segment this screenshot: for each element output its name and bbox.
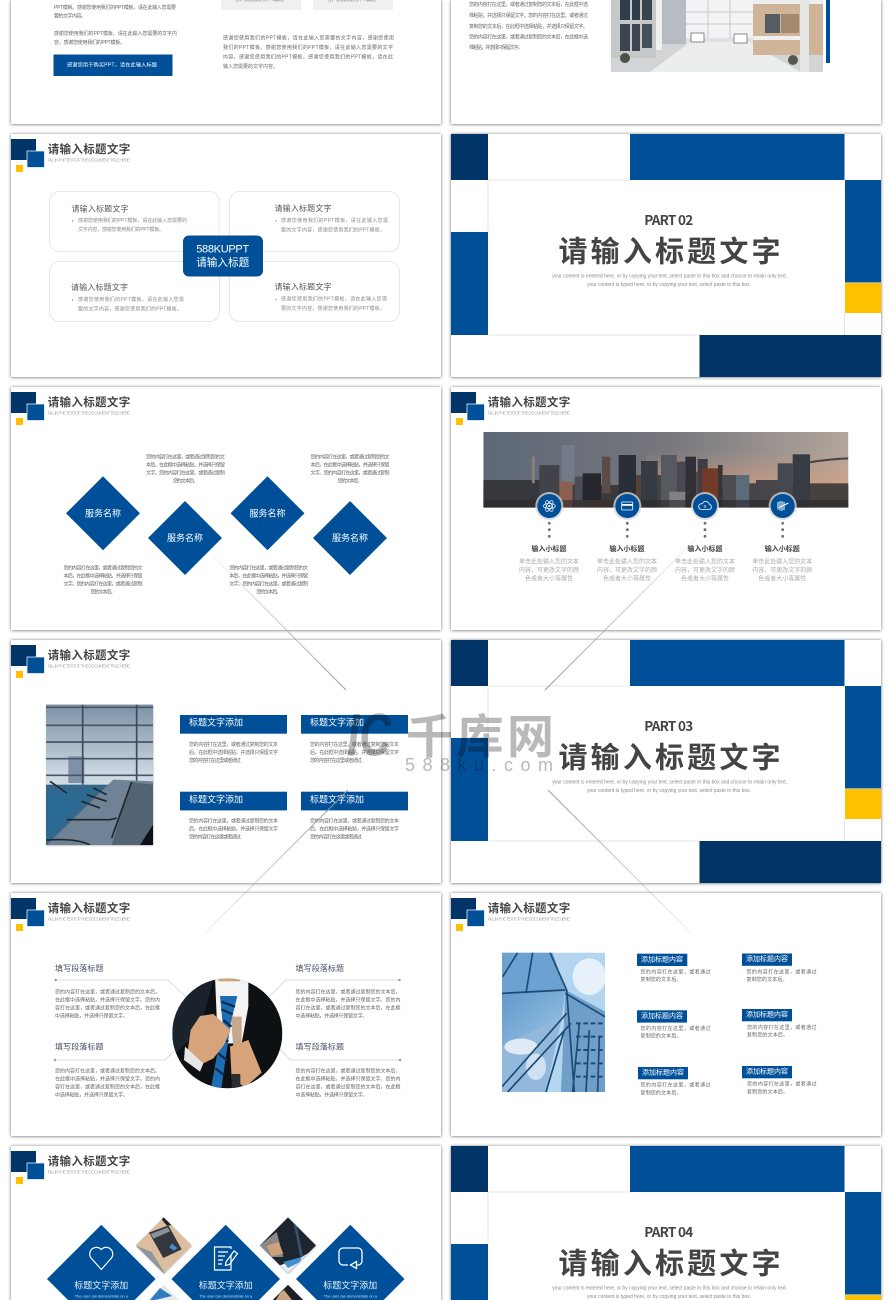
section title: 请输入标题文字 (558, 228, 780, 270)
card 2 (230, 192, 400, 252)
column 1 text: 单击此处输入您的文本 (519, 558, 579, 566)
paragraph top left (55, 963, 160, 1020)
text below diamond 1: 您的文本后。 (90, 589, 116, 596)
section subtitle (552, 274, 787, 288)
column 4 text: 单击此处输入您的文本 (752, 558, 812, 566)
card 1: 感谢您使用我们的PPT模板，请在此输入您需要的 (78, 217, 187, 224)
paragraph top left: 您的内容打在这里，或者通过复制您的文本后， (55, 989, 160, 996)
block 4: 后，在此框中选择粘贴，并选择只保留文字 (310, 826, 399, 833)
card 2: 感谢您使用我们的PPT模板，请在此输入您需 (281, 217, 388, 224)
text above diamond 4: 您的文本后。 (338, 478, 362, 485)
block 3: 标题文字添加 (189, 794, 243, 804)
column 4 text (752, 544, 812, 583)
paragraph top right: 在此框中选择粘贴，并选择只保留文字。您的内 (296, 997, 400, 1004)
slide: service diamonds (row 3 left) (11, 387, 441, 630)
watermark diagonal lines (203, 539, 696, 935)
label 6: 您的内容打在这里，或者通过 (747, 1081, 816, 1088)
card 4 (230, 262, 400, 322)
paragraph top right: 中选择粘贴，并选择只保留文字。 (296, 1013, 368, 1020)
block 3: 您的内容打在这里或者通过 (189, 834, 241, 841)
connector lines (55, 980, 400, 1060)
right paragraph: 感谢您使用我们的PPT模板，请在此输入您需要的文字内容，感谢您使用 (223, 34, 394, 42)
diamond 2: 服务名称 (167, 532, 203, 543)
paragraph top right: 填写段落标题 (296, 963, 344, 973)
column 2 text: 单击此处输入您的文本 (597, 558, 657, 566)
diamond card 3: The user can demonstrate on a (324, 1294, 378, 1298)
paragraph bottom right (296, 1042, 400, 1098)
label 2: 添加标题内容 (746, 954, 788, 963)
block 2 (301, 715, 408, 764)
right paragraph (223, 34, 394, 70)
text above diamond 4: 本后，在此框中选择粘贴，并选择只保留 (310, 462, 390, 469)
column 4 text: 输入小标题 (765, 544, 800, 553)
label 5: 复制您的文本后。 (640, 1089, 682, 1096)
label 4: 您的内容打在这里，或者通过 (747, 1024, 816, 1031)
photo: building interior (611, 0, 823, 72)
section subtitle (552, 780, 787, 794)
left text block: 要的文字内容。 (54, 12, 86, 20)
column 2 text (597, 544, 657, 583)
column 3 text: 输入小标题 (688, 544, 722, 553)
column 1 text: 内容，可更改文字的颜 (519, 566, 579, 574)
slide header: 请输入标题文字 (48, 142, 130, 156)
slide header: 请输入标题文字 (48, 901, 130, 915)
blue button (54, 54, 172, 76)
block 2: 后，在此框中选择粘贴，并选择只保留文字 (310, 749, 399, 756)
photo diamond: calculator (136, 1217, 192, 1273)
text above diamond 4: 文字。您的内容打在这里，或者通过复制 (310, 470, 390, 477)
block 4: 标题文字添加 (310, 794, 364, 804)
label 4 (742, 1009, 816, 1038)
slide header: FILL IN THE TEXT OF THE DOCUMENT TITLE HERE (488, 410, 570, 416)
right paragraph: 输入您需要的文字内容。 (223, 63, 278, 70)
section subtitle (552, 1286, 787, 1300)
text above diamond 4 (310, 454, 390, 485)
part number: PART 03 (644, 715, 693, 735)
centre badge (183, 236, 263, 276)
label 3: 复制您的文本后。 (640, 1033, 682, 1040)
watermark url: 588ku.com (405, 755, 553, 775)
card 3: 请输入标题文字 (71, 282, 128, 292)
card 1 (50, 192, 219, 252)
column 3 text: 内容，可更改文字的颜 (675, 566, 735, 574)
paragraph top left: 在此框中选择粘贴，并选择只保留文字。您的内 (55, 997, 160, 1004)
connector dots (548, 522, 784, 538)
text block: 您的内容打在这里，或者通过复制您的文本后，在此框中选 (469, 1, 588, 8)
paragraph bottom left: 填写段落标题 (55, 1042, 104, 1052)
slide: text and interior photo (row 1 right) (451, 0, 881, 124)
paragraph bottom right: 容打在这里，或者通过复制您的文本后，在此框 (296, 1083, 400, 1090)
label 6: 添加标题内容 (746, 1066, 788, 1076)
card 3: 要的文字内容，感谢您使用我们的PPT模板。 (78, 306, 182, 312)
block 1: 您的内容打在这里，或者通过复制您的文本 (189, 741, 278, 748)
grey tag boxes (221, 0, 393, 10)
left text block (54, 4, 177, 46)
slide header (11, 898, 130, 931)
label 1: 您的内容打在这里，或者通过 (640, 968, 710, 976)
card 2: 请输入标题文字 (274, 203, 332, 213)
label 5: 您的内容打在这里，或者通过 (640, 1082, 710, 1089)
photo: man adjusting tie (172, 977, 282, 1089)
section title: 请输入标题文字 (558, 734, 780, 776)
photo: airport lounge (46, 705, 153, 845)
diamond 1: 服务名称 (85, 507, 121, 518)
slide header (451, 392, 570, 425)
icon: heart (90, 1247, 113, 1270)
icon: document and pencil (214, 1247, 238, 1270)
slide header: 请输入标题文字 (48, 1154, 130, 1168)
block 2: 您的内容打在这里或者通过 (310, 757, 362, 764)
block 2: 您的内容打在这里，或者通过复制您的文本 (310, 741, 399, 748)
column 2 text: 输入小标题 (610, 544, 644, 553)
slide: four text cards (row 2 left) (11, 134, 441, 377)
diamond 2 (148, 501, 222, 575)
block 3 (180, 792, 287, 841)
block 1 (180, 715, 287, 764)
block 1: 标题文字添加 (189, 716, 243, 728)
slide: text and button (row 1 left) (11, 0, 441, 124)
right paragraph: 我们的PPT模板。感谢您使用我们的PPT模板，请在此输入您需要的文字 (223, 44, 393, 51)
icon: atom (535, 492, 563, 520)
text below diamond 3: 文字。您的内容打在这里，或者通过复制 (229, 581, 308, 588)
text below diamond 3 (229, 565, 308, 596)
photo diamonds: lower row (148, 1285, 303, 1300)
label 1: 添加标题内容 (641, 954, 683, 963)
slide header (11, 139, 130, 172)
label 5 (638, 1067, 710, 1096)
text below diamond 1: 您的内容打在这里，或者通过复制您的文 (64, 565, 142, 572)
text below diamond 1: 本后，在此框中选择粘贴，并选择只保留 (64, 573, 142, 580)
slide header: FILL IN THE TEXT OF THE DOCUMENT TITLE HERE (48, 664, 130, 668)
diamond card 3 (296, 1225, 405, 1300)
watermark name: 千库网 (406, 698, 554, 768)
slide: portrait circle with four paragraphs (row 5 left) (11, 893, 441, 1136)
left text block: 感谢您使用我们的PPT模板。请在此输入您需要的文字内 (54, 30, 177, 37)
label 1: 复制您的文本后。 (640, 976, 682, 983)
diamond 1 (66, 476, 140, 550)
paragraph bottom left: 在此框中选择粘贴，并选择只保留文字。您的内 (55, 1075, 160, 1082)
connector end dots (54, 979, 401, 1061)
text below diamond 3: 您的文本后。 (256, 589, 281, 596)
section subtitle: your content is entered here, or by copying your text, select paste in this box and choose to retain only text. (552, 274, 787, 280)
column 1 text: 色或者大小等属性 (525, 575, 573, 583)
card 4: 感谢您使用我们的PPT模板，请在此输入您需 (281, 296, 387, 302)
left text block: 容，感谢您使用我们的PPT模板。 (54, 39, 125, 46)
paragraph bottom right: 中选择粘贴，并选择只保留文字。 (296, 1091, 368, 1098)
label 4: 添加标题内容 (746, 1010, 788, 1018)
paragraph bottom left: 您的内容打在这里，或者通过复制您的文本后。 (55, 1067, 160, 1074)
block 2: 标题文字添加 (310, 716, 364, 728)
slide header (11, 392, 130, 425)
paragraph top left: 容打在这里，或者通过复制您的文本后，在此框 (55, 1005, 160, 1012)
watermark logo mark: IC (347, 702, 392, 768)
text block: 择粘贴，并选择只保留文字。 (469, 44, 523, 51)
slide header: 请输入标题文字 (48, 395, 130, 409)
card 1: 请输入标题文字 (72, 204, 128, 214)
left text block: PPT模板。感谢您使用我们的PPT模板，请在此输入您需要 (54, 4, 176, 11)
paragraph bottom right: 您的内容打在这里，或者通过复制您的文本后， (296, 1067, 400, 1074)
diamond card 2: The user can demonstrate on a (199, 1294, 253, 1298)
icon: bank card (613, 492, 641, 520)
section divider: PART 03 (451, 640, 881, 883)
text below diamond 3: 您的内容打在这里，或者通过复制您的文 (229, 565, 308, 572)
watermark (203, 539, 696, 935)
text below diamond 1 (64, 565, 142, 596)
section subtitle: your content is typed here, or by copying your text, select paste in this box. (587, 282, 751, 288)
paragraph bottom left (55, 1042, 160, 1098)
colour blocks (451, 134, 881, 377)
block 1: 您的内容打在这里或者通过 (189, 757, 241, 764)
card 2: 要的文字内容，感谢您使用我们的PPT模板。 (281, 226, 385, 234)
text above diamond 2: 您的内容打在这里，或者通过复制您的文 (146, 454, 225, 461)
blue accent bar (826, 0, 830, 63)
label 1 (637, 954, 710, 983)
colour blocks (451, 640, 881, 883)
label 3 (637, 1010, 710, 1040)
block 3: 后，在此框中选择粘贴，并选择只保留文字 (189, 826, 278, 833)
slide header: 请输入标题文字 (488, 901, 570, 915)
paragraph bottom right: 填写段落标题 (296, 1042, 344, 1052)
column 1 text: 输入小标题 (532, 544, 566, 553)
paragraph top right (296, 963, 400, 1020)
paragraph top left: 中选择粘贴，并选择只保留文字。 (55, 1013, 128, 1020)
diamond card 1: The user can demonstrate on a (75, 1294, 129, 1298)
diamond 4: 服务名称 (332, 532, 368, 543)
diamond 4 (313, 501, 387, 575)
column 4 text: 内容，可更改文字的颜 (752, 566, 812, 574)
slide: airport photo and four blocks (row 4 left) (11, 640, 441, 883)
block 3: 您的内容打在这里，或者通过复制您的文本 (189, 818, 278, 825)
section title: 请输入标题文字 (558, 1240, 780, 1282)
icon: cloud (691, 492, 719, 520)
centre badge: 588KUPPT (196, 244, 249, 256)
label 3: 添加标题内容 (641, 1011, 683, 1020)
right paragraph: 内容，感谢您使用我们的PPT模板。感谢您使用我们的PPT模板，请在此 (223, 54, 393, 60)
diamond card 1: 标题文字添加 (74, 1279, 128, 1290)
slide header (11, 1151, 130, 1184)
section divider: PART 02 (451, 134, 881, 377)
section subtitle: your content is typed here, or by copying your text, select paste in this box. (587, 1294, 751, 1300)
paragraph bottom right: 在此框中选择粘贴，并选择只保留文字。您的内 (296, 1075, 400, 1082)
label 2: 复制您的文本后。 (746, 976, 788, 983)
column 2 text: 色或者大小等属性 (603, 575, 651, 583)
card 4: 请输入标题文字 (274, 282, 332, 292)
diamond card 1 (47, 1225, 156, 1300)
column 1 text (519, 544, 579, 583)
text block: 择粘贴，并选择只保留文字。您的内容打在这里，或者通过 (469, 12, 588, 19)
centre badge: 请输入标题 (196, 256, 250, 269)
part number: PART 04 (644, 1221, 693, 1241)
paragraph top right: 您的内容打在这里，或者通过复制您的文本后， (296, 989, 400, 996)
photo: city skyline (483, 432, 848, 508)
card 1: 文字内容，感谢您使用我们的PPT模板。 (78, 226, 164, 233)
slide: city skyline with four icons (row 3 right) (451, 387, 881, 630)
icon: hand (769, 492, 797, 520)
label 4: 复制您的文本后。 (747, 1032, 788, 1038)
photo: glass tower (502, 953, 606, 1092)
slide header: FILL IN THE TEXT OF THE DOCUMENT TITLE HERE (488, 916, 570, 922)
slide header (451, 898, 570, 931)
label 6 (742, 1066, 816, 1095)
paragraph top right: 容打在这里，或者通过复制您的文本后，在此框 (296, 1005, 400, 1012)
text below diamond 3: 本后，在此框中选择粘贴，并选择只保留 (229, 573, 308, 580)
slide header: FILL IN THE TEXT OF THE DOCUMENT TITLE HERE (48, 410, 130, 416)
slide header (11, 645, 130, 678)
paragraph bottom left: 中选择粘贴，并选择只保留文字。 (55, 1091, 128, 1098)
text above diamond 4: 您的内容打在这里，或者通过复制您的文 (310, 454, 390, 461)
text above diamond 2: 您的文本后。 (173, 478, 198, 485)
block 4: 您的内容打在这里，或者通过复制您的文本 (310, 818, 399, 825)
text block (469, 1, 588, 51)
slide header: 请输入标题文字 (48, 648, 130, 662)
label 3: 您的内容打在这里，或者通过 (640, 1025, 710, 1032)
label 6: 复制您的文本后。 (747, 1088, 788, 1095)
block 4 (301, 792, 408, 841)
photo diamond: business suit (260, 1217, 316, 1273)
diamond 3 (230, 476, 304, 550)
label 5: 添加标题内容 (642, 1068, 684, 1076)
diamond card 3: 标题文字添加 (323, 1279, 377, 1290)
slide header: 请输入标题文字 (488, 395, 570, 409)
part number: PART 02 (644, 209, 693, 229)
block 4: 您的内容打在这里或者通过 (310, 834, 362, 841)
text block: 复制您的文本后，在此框中选择粘贴，并选择只保留文字。 (469, 23, 588, 30)
slide: diamonds with icons and photos (row 6 left) (11, 1146, 441, 1300)
diamond card 2: 标题文字添加 (199, 1279, 253, 1290)
card 3 (50, 262, 220, 322)
section divider: PART 04 (451, 1146, 881, 1300)
column 3 text: 单击此处输入您的文本 (675, 558, 735, 566)
column 3 text (675, 544, 735, 583)
slide header: FILL IN THE TEXT OF THE DOCUMENT TITLE HERE (48, 916, 130, 922)
card 3: 感谢您使用我们的PPT模板，请在此输入您需 (78, 296, 184, 303)
text above diamond 2 (146, 454, 225, 485)
colour blocks (451, 1146, 881, 1300)
text above diamond 2: 文字。您的内容打在这里，或者通过复制 (146, 470, 225, 477)
column 2 text: 内容，可更改文字的颜 (597, 566, 657, 574)
slide header: FILL IN THE TEXT OF THE DOCUMENT TITLE HERE (48, 1170, 130, 1174)
column 3 text: 色或者大小等属性 (681, 575, 729, 583)
icon: speech bubble (339, 1248, 362, 1268)
text block: 您的内容打在这里，或者通过复制您的文本后，在此框中选 (469, 34, 588, 40)
diamond card 2 (171, 1225, 280, 1300)
card 4: 要的文字内容，感谢您使用我们的PPT模板。 (281, 305, 385, 312)
block 1: 后，在此框中选择粘贴，并选择只保留文字 (189, 749, 278, 756)
diamond 3: 服务名称 (250, 507, 286, 518)
label 2 (742, 954, 816, 983)
section subtitle: your content is entered here, or by copying your text, select paste in this box and choose to retain only text. (552, 1286, 787, 1292)
paragraph bottom left: 容打在这里，或者通过复制您的文本后，在此框 (55, 1083, 160, 1090)
text below diamond 1: 文字。您的内容打在这里，或者通过复制 (64, 581, 142, 588)
paragraph top left: 填写段落标题 (55, 963, 104, 973)
section subtitle: your content is typed here, or by copying your text, select paste in this box. (587, 788, 751, 794)
slide header: FILL IN THE TEXT OF THE DOCUMENT TITLE HERE (48, 158, 130, 162)
slide: glass tower with six labels (row 5 right) (451, 893, 881, 1136)
text above diamond 2: 本后，在此框中选择粘贴，并选择只保留 (146, 462, 225, 469)
column 4 text: 色或者大小等属性 (758, 575, 806, 583)
section subtitle: your content is entered here, or by copying your text, select paste in this box and choose to retain only text. (552, 780, 787, 786)
label 2: 您的内容打在这里，或者通过 (746, 968, 816, 976)
blue button: 感谢您用于购买PPT，请在此输入标题 (67, 61, 157, 69)
